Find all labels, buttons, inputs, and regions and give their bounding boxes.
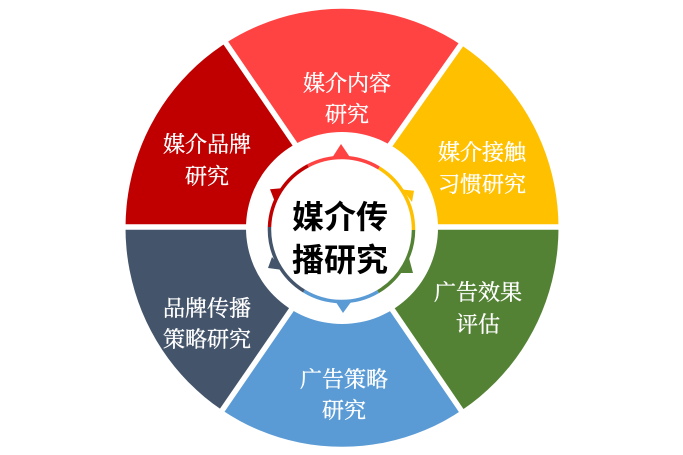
media communication research wheel bbox=[126, 8, 558, 447]
label: media brand: 研究 bbox=[185, 164, 229, 189]
label: brand communication strategy bbox=[163, 296, 251, 352]
ring arc: slate bbox=[268, 227, 304, 291]
label: media content bbox=[303, 71, 391, 127]
segment: brand communication strategy bbox=[126, 230, 289, 409]
center white disc bbox=[246, 132, 438, 324]
segment: advertising strategy bbox=[224, 311, 459, 447]
segment gaps bbox=[120, 0, 564, 455]
label: advertising effect bbox=[434, 280, 522, 337]
ring arc: dark red bbox=[270, 166, 308, 227]
ring with arrow markers bbox=[268, 144, 414, 313]
center title: 播研究 bbox=[292, 242, 388, 278]
wheel segments bbox=[110, 0, 570, 455]
ring arc: blue bbox=[304, 291, 378, 313]
label: media brand: 媒介品牌 bbox=[163, 132, 251, 157]
segment: advertising effect bbox=[394, 230, 558, 409]
label: advertising strategy: 研究 bbox=[322, 398, 366, 423]
label: media content: 研究 bbox=[325, 102, 369, 127]
ring arc: green bbox=[378, 230, 414, 292]
label: media contact habits: 习惯研究 bbox=[438, 172, 526, 197]
label: media contact habits: 媒介接触 bbox=[438, 140, 527, 165]
center title: 媒介传 bbox=[292, 199, 388, 235]
segment: media brand bbox=[126, 44, 293, 224]
label: advertising effect: 广告效果 bbox=[434, 280, 522, 305]
label: media content: 媒介内容 bbox=[303, 71, 391, 96]
segment: media content bbox=[228, 8, 458, 144]
label: advertising strategy: 广告策略 bbox=[300, 367, 388, 392]
center title bbox=[292, 199, 388, 278]
label: advertising effect: 评估 bbox=[456, 312, 500, 337]
label: media contact habits bbox=[438, 140, 527, 197]
ring arc: red bbox=[308, 144, 379, 168]
label: media brand bbox=[163, 132, 251, 189]
ring arc: yellow bbox=[379, 168, 414, 230]
label: advertising strategy bbox=[300, 367, 388, 423]
label: brand communication strategy: 策略研究 bbox=[163, 327, 251, 352]
segment: media contact habits bbox=[392, 46, 558, 224]
label: brand communication strategy: 品牌传播 bbox=[163, 296, 251, 321]
